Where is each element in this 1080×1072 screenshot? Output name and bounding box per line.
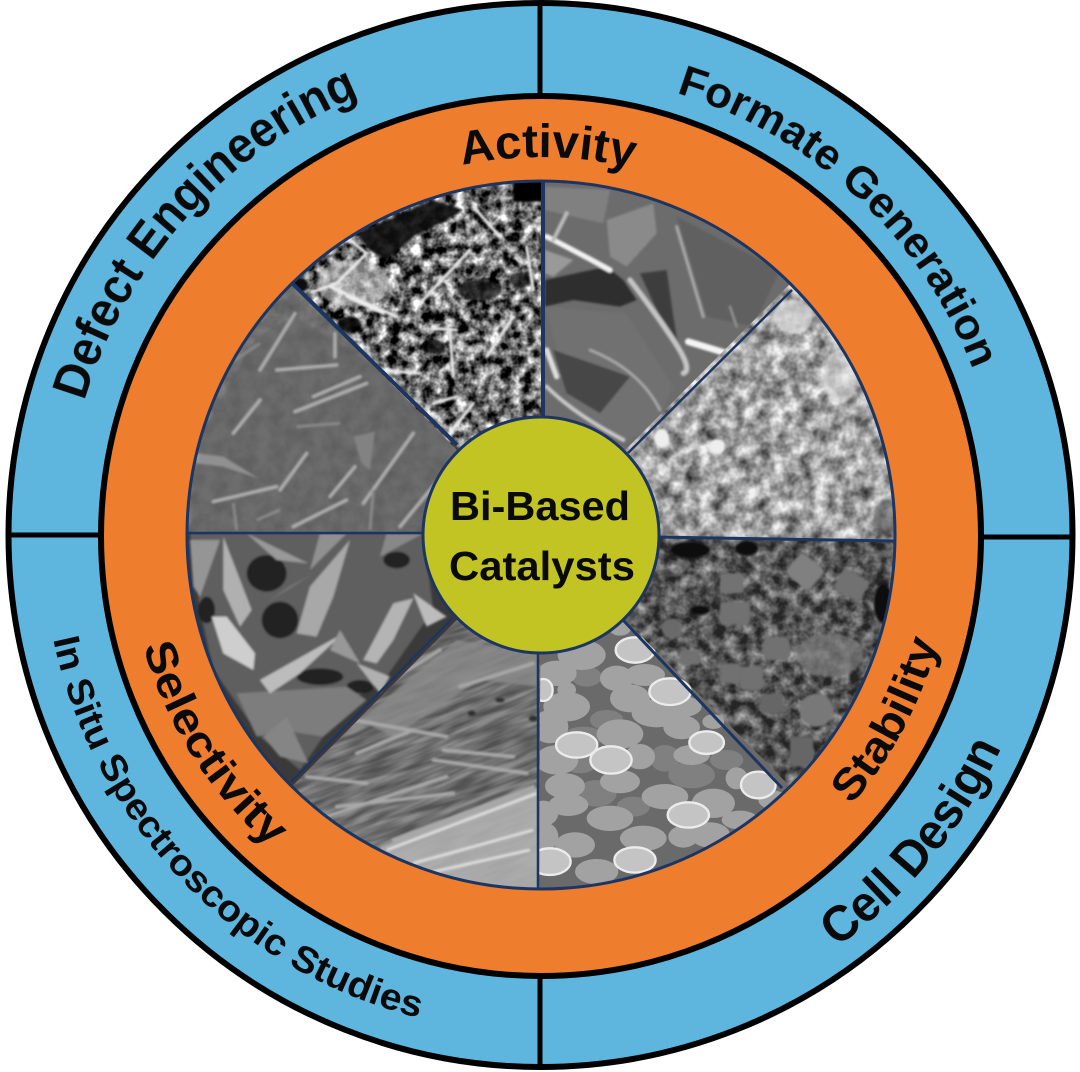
micrograph: disc particle wedge [539,620,789,888]
micrograph: nanowire wedge [280,170,550,460]
micrograph: porous wedge [625,284,894,540]
dark discs [563,667,743,817]
outer label: Formate Generation: Formate Generation [678,66,992,368]
outer label: Cell Design: Cell Design [823,741,1000,941]
ring label: Selectivity: Selectivity [146,642,287,844]
wedge separators [187,180,896,890]
orange ring [101,96,981,976]
center hub [423,417,659,653]
ring label: Activity: Activity [463,123,638,174]
micrograph: crystal wedge [625,538,894,786]
micrograph: ridged wedge [293,620,776,888]
ring label: Stability: Stability [833,636,942,800]
center hub: Bi-Based [450,483,630,529]
micrograph: folded sheet wedge [545,182,790,450]
outer label: Defect Engineering: Defect Engineering [52,72,358,398]
outer label: In Situ Spectroscopic Studies: In Situ Spectroscopic Studies [54,636,421,1016]
wheel border [187,181,895,889]
micrograph: spike wedge [188,534,457,786]
micrograph: flake wedge [188,286,457,532]
center hub: Catalysts [449,543,635,589]
panel: micrograph wheel [188,182,894,888]
